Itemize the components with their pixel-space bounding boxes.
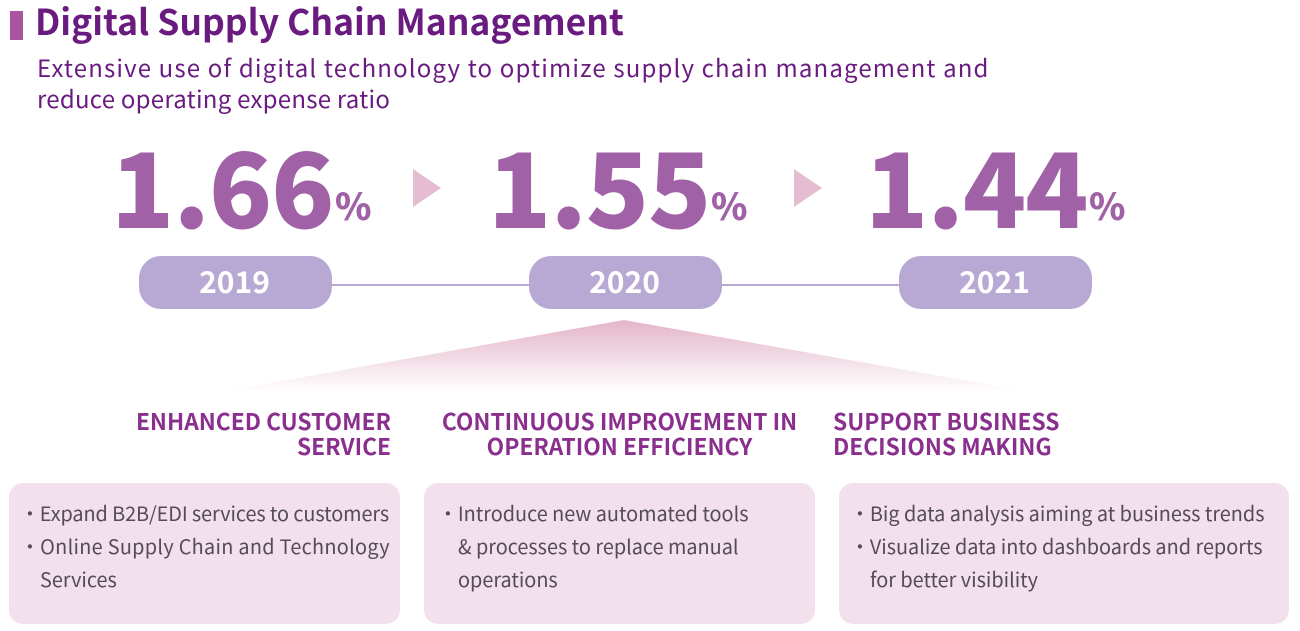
customer service text: Services: [40, 564, 117, 593]
subtitle: reduce operating expense ratio: [37, 80, 390, 115]
pill 2019: [139, 256, 332, 309]
pill 2019: 2019: [199, 258, 270, 302]
gradient spotlight: [268, 320, 982, 384]
business decisions text: ・Visualize data into dashboards and reports: [850, 531, 1263, 560]
customer service text: [20, 498, 390, 593]
pill 2021: [899, 256, 1092, 309]
operation efficiency text: operations: [458, 564, 558, 593]
business decisions text: for better visibility: [870, 564, 1038, 593]
percent 2021: %: [1089, 177, 1125, 231]
pill 2021: 2021: [959, 258, 1030, 302]
title marker: [10, 11, 23, 40]
percent 2019: %: [335, 177, 371, 231]
heading: customer service: SERVICE: [297, 429, 391, 462]
value 2021: 1.44: [865, 107, 1088, 258]
customer service text: ・Online Supply Chain and Technology: [20, 531, 390, 560]
pill 2020: 2020: [589, 258, 660, 302]
arrow 2: [794, 169, 822, 207]
heading: business decisions: SUPPORT BUSINESS: [833, 404, 1059, 437]
heading: operation efficiency: [442, 404, 797, 462]
pill 2020: [529, 256, 722, 309]
subtitle: Extensive use of digital technology to optimize supply chain management and: [37, 49, 990, 84]
operation efficiency text: & processes to replace manual: [458, 531, 739, 560]
panel: operation efficiency: [424, 483, 815, 624]
business decisions text: ・Big data analysis aiming at business trends: [850, 498, 1264, 527]
value 2020: 1.55: [488, 107, 711, 258]
heading: customer service: ENHANCED CUSTOMER: [136, 404, 391, 437]
operation efficiency text: ・Introduce new automated tools: [438, 498, 748, 527]
operation efficiency text: [438, 498, 748, 593]
value 2019: 1.66: [111, 107, 334, 258]
customer service text: ・Expand B2B/EDI services to customers: [20, 498, 389, 527]
heading: business decisions: [833, 404, 1059, 462]
percent 2020: %: [711, 177, 747, 231]
panel: business decisions: [839, 483, 1289, 624]
heading: operation efficiency: OPERATION EFFICIENCY: [487, 429, 752, 462]
heading: operation efficiency: CONTINUOUS IMPROVEMENT IN: [442, 404, 797, 437]
subtitle: [37, 49, 990, 115]
timeline line: [300, 284, 950, 286]
panel: customer service: [9, 483, 400, 624]
arrow 1: [413, 169, 441, 207]
business decisions text: [850, 498, 1264, 593]
heading: customer service: [136, 404, 391, 462]
heading: business decisions: DECISIONS MAKING: [833, 429, 1052, 462]
